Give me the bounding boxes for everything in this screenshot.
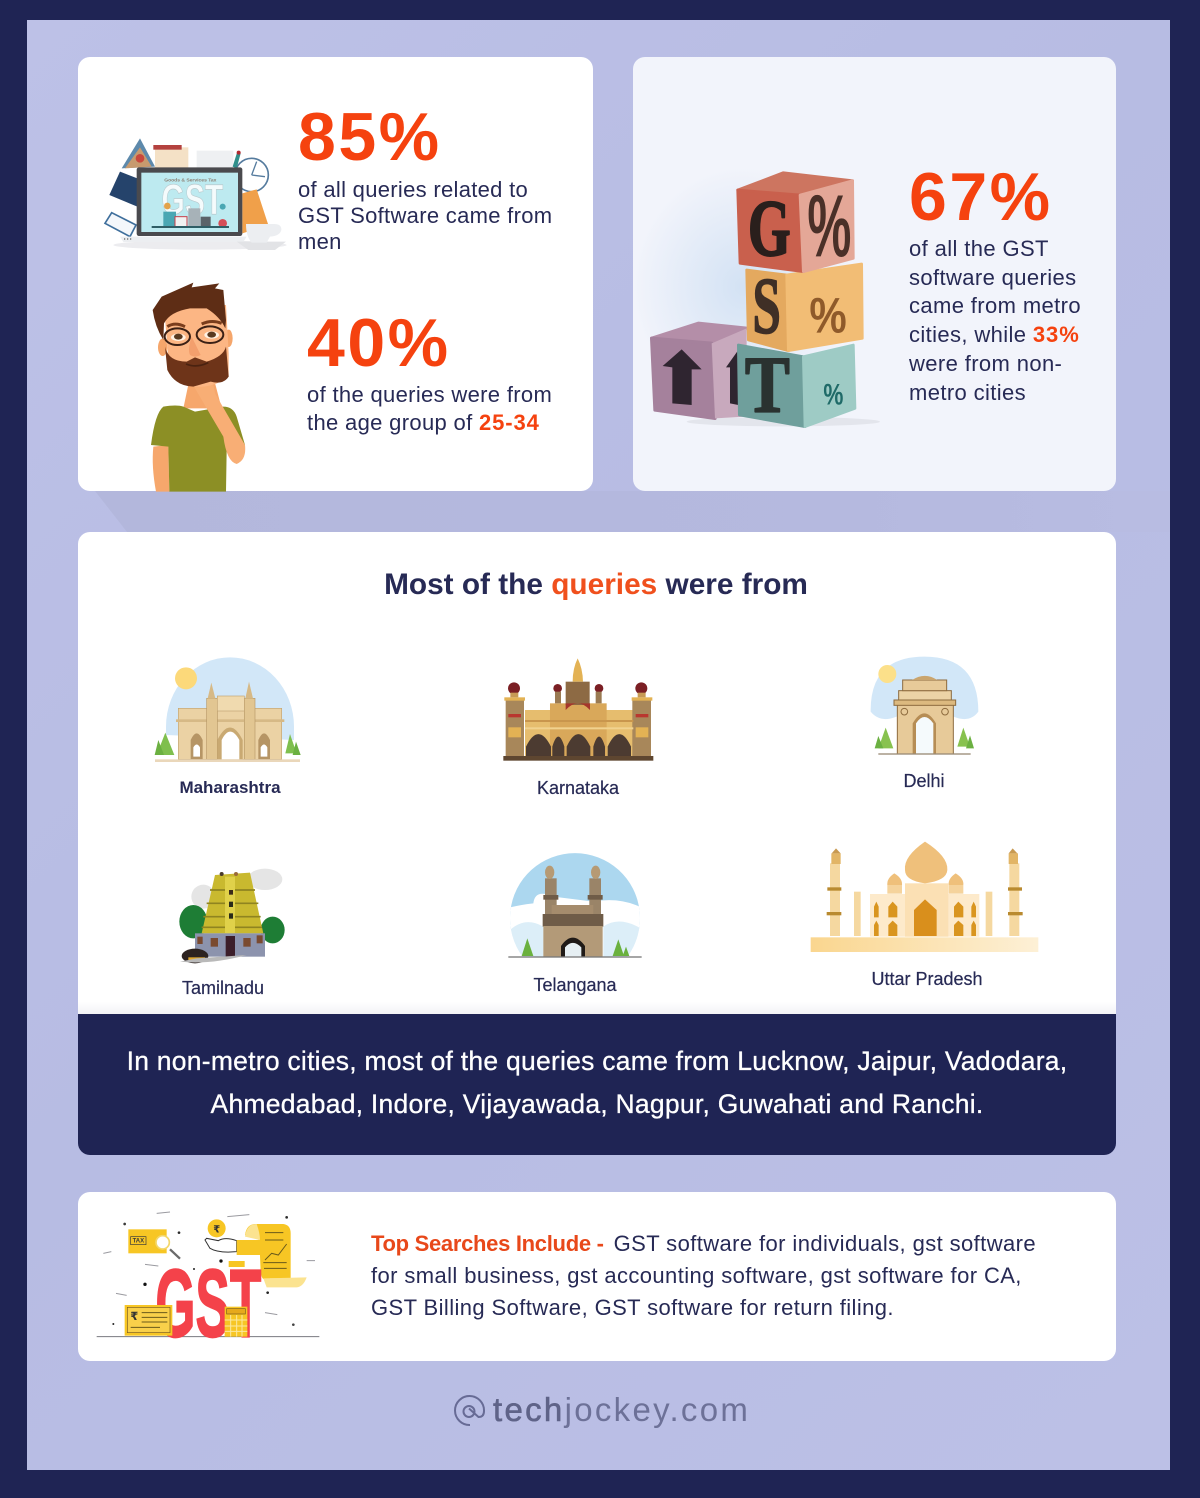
icon: India Gate	[870, 656, 978, 755]
icon: laptop with GST desk items	[104, 138, 286, 250]
text: metro vs non-metro: came from metro	[909, 293, 1081, 318]
icon: Taj Mahal	[810, 842, 1038, 952]
text: metro vs non-metro: were from non-	[909, 351, 1062, 376]
text: men queries	[298, 177, 552, 254]
stat: 40 percent: 40%	[307, 305, 451, 381]
text: metro vs non-metro: software queries	[909, 265, 1076, 290]
stat: 85 percent: 85%	[298, 99, 442, 175]
icon: GST percentage blocks: %	[823, 378, 843, 411]
text: age group: of the queries were from	[307, 382, 552, 407]
label: Telangana: Telangana	[533, 975, 617, 995]
text: men queries: of all queries related to	[298, 177, 528, 202]
icon: GST with invoices and calculator	[96, 1212, 320, 1358]
icon: logo ring	[454, 1395, 485, 1426]
banner: non-metro cities: In non-metro cities, most of the queries came from Lucknow, Jaipur, Vadodara,	[127, 1046, 1067, 1076]
text: men queries: GST Software came from	[298, 203, 552, 228]
text: metro vs non-metro	[909, 236, 1081, 405]
text: men queries: men	[298, 229, 342, 254]
label: Delhi: Delhi	[903, 771, 945, 791]
icon: Mysore Palace	[503, 658, 654, 761]
icon: Tamil temple gopuram	[179, 868, 285, 964]
soft glow behind blocks	[633, 167, 853, 407]
icon: thinking bearded man	[151, 282, 246, 492]
icon: laptop with GST desk items: GST	[161, 176, 223, 224]
panel: metro city stats	[633, 57, 1116, 491]
icon: GST percentage blocks: %	[809, 287, 847, 343]
icon: GST percentage blocks: S	[752, 263, 781, 351]
panel: top searches	[78, 1192, 1116, 1361]
logo: techjockey.com	[454, 1391, 750, 1428]
label: Maharashtra: Maharashtra	[179, 778, 281, 797]
icon: laptop with GST desk items: Goods & Services Tax	[164, 178, 217, 184]
label: Uttar Pradesh: Uttar Pradesh	[871, 969, 983, 989]
text: metro vs non-metro: metro cities	[909, 380, 1026, 405]
text: top searches list: Top Searches Include - GST software for individuals, gst software	[371, 1231, 1036, 1256]
icon: GST with invoices and calculator: ₹	[213, 1224, 220, 1235]
wordmark: techjockey.com	[493, 1391, 750, 1428]
icon: GST percentage blocks: G	[748, 185, 791, 273]
icon: GST percentage blocks: %	[807, 177, 851, 276]
icon: GST percentage blocks	[650, 171, 880, 430]
icon: GST percentage blocks: T	[745, 342, 790, 430]
banner: non-metro cities	[78, 1014, 1116, 1155]
panel: most queries by state	[78, 532, 1116, 1014]
heading: Most of the queries were from	[384, 568, 808, 601]
icon: GST with invoices and calculator: TAX	[133, 1239, 144, 1245]
text: metro vs non-metro: cities, while 33%	[909, 322, 1080, 347]
stat: 67 percent: 67%	[909, 159, 1053, 235]
text: age group: the age group of 25-34	[307, 410, 540, 435]
icon: GST with invoices and calculator: ₹	[130, 1311, 138, 1323]
icon: Charminar	[508, 853, 642, 958]
text: top searches list	[371, 1231, 1036, 1320]
icon: GST with invoices and calculator: GST	[155, 1250, 261, 1358]
text: top searches list: for small business, gst accounting software, gst software for CA,	[371, 1263, 1022, 1288]
label: Karnataka: Karnataka	[537, 778, 619, 798]
text: age group	[307, 382, 552, 435]
text: top searches list: GST Billing Software, GST software for return filing.	[371, 1295, 894, 1320]
icon: Gateway of India	[154, 657, 301, 762]
label: Tamilnadu: Tamilnadu	[182, 978, 264, 998]
banner: non-metro cities: Ahmedabad, Indore, Vijayawada, Nagpur, Guwahati and Ranchi.	[211, 1089, 983, 1119]
panel: gender and age stats	[78, 57, 593, 491]
text: metro vs non-metro: of all the GST	[909, 236, 1049, 261]
